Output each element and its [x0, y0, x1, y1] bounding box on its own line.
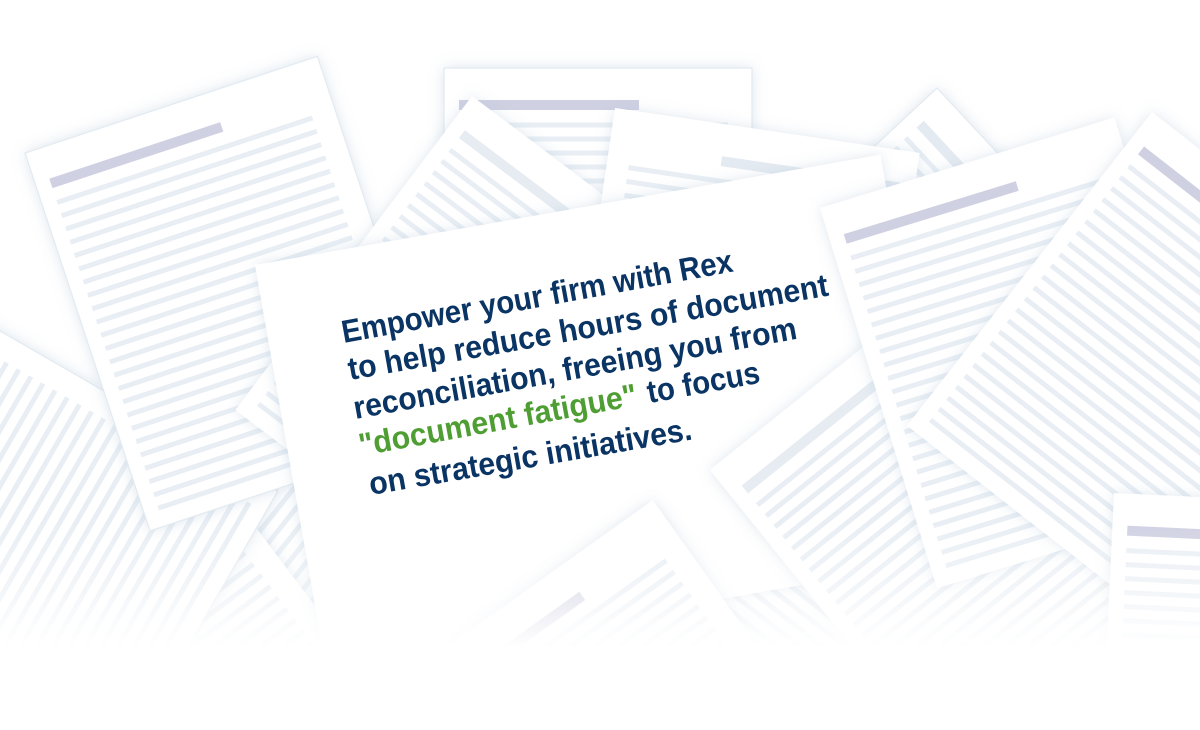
headline text: reconciliation, freeing you from	[350, 310, 799, 426]
document: lower left under stack	[0, 471, 453, 730]
document: hidden behind centre, left	[40, 250, 543, 730]
document: bottom right	[1095, 493, 1200, 730]
document: lower right of centre	[710, 277, 1199, 730]
document: top left	[25, 56, 442, 531]
document: top middle, rotated right	[235, 96, 715, 593]
headline text: on strategic initiatives.	[366, 411, 694, 502]
document: under centre, bottom	[515, 330, 1003, 730]
document: top middle, slight tilt	[557, 108, 920, 547]
document: far right	[907, 112, 1200, 615]
document: bottom centre	[402, 500, 884, 730]
headline text	[338, 243, 831, 502]
panel: central document	[255, 155, 952, 669]
headline text: to help reduce hours of document	[345, 267, 831, 387]
headline text: "document fatigue"	[356, 377, 640, 463]
bottom fade	[0, 520, 1200, 648]
document: straight, back top	[444, 68, 752, 466]
document: large left, rotated	[0, 292, 278, 730]
headline text: to focus	[644, 354, 763, 410]
headline text: Empower your firm with Rex	[338, 243, 736, 350]
document: small top right	[646, 88, 1147, 585]
document: right, tilted	[820, 117, 1200, 588]
